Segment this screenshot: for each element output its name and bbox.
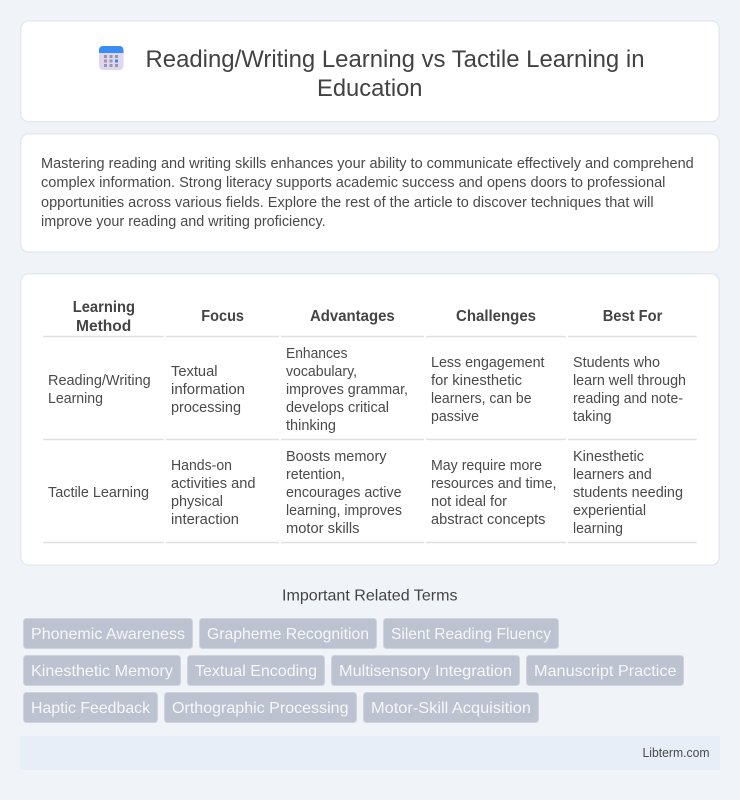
table row: Tactile Learning: interaction bbox=[171, 512, 239, 528]
text block: introduction paragraph: complex information. Strong literacy supports academic success and opens doors to professional bbox=[41, 175, 665, 191]
tag: Manuscript Practice: Manuscript Practice bbox=[534, 663, 677, 680]
table row: Reading/Writing Learning: Enhances bbox=[286, 346, 348, 362]
table row: Reading/Writing Learning: for kinesthetic bbox=[431, 373, 522, 389]
table row: Reading/Writing Learning: vocabulary, bbox=[286, 364, 357, 380]
table row: Tactile Learning: May require more bbox=[431, 458, 542, 474]
panel: introduction bbox=[21, 134, 719, 252]
table row: Tactile Learning: Kinesthetic bbox=[573, 449, 644, 465]
title: Reading/Writing Learning vs Tactile Learning in bbox=[146, 46, 644, 73]
table row: Reading/Writing Learning: Students who bbox=[573, 355, 660, 371]
table row: Tactile Learning: not ideal for bbox=[431, 494, 507, 510]
table row: Tactile Learning: learning bbox=[573, 521, 623, 537]
tag: Orthographic Processing: Orthographic Processing bbox=[172, 700, 348, 717]
table row: Reading/Writing Learning: Textual bbox=[171, 364, 218, 380]
table row: Reading/Writing Learning: reading and note- bbox=[573, 391, 683, 407]
tag: Grapheme Recognition bbox=[200, 618, 376, 648]
table header row: Method bbox=[76, 318, 131, 335]
table row: Tactile Learning: physical bbox=[171, 494, 223, 510]
table row: Reading/Writing Learning bbox=[48, 346, 686, 434]
table row: Tactile Learning: Hands-on bbox=[171, 458, 232, 474]
tag: Textual Encoding bbox=[188, 656, 324, 686]
table header row: Best For bbox=[603, 308, 662, 325]
table row: Tactile Learning: learning, improves bbox=[286, 503, 402, 519]
heading: related terms: Important Related Terms bbox=[282, 588, 458, 604]
text block: introduction paragraph bbox=[41, 156, 694, 230]
tag: Phonemic Awareness bbox=[24, 618, 192, 648]
table row: Tactile Learning: Boosts memory bbox=[286, 449, 387, 465]
table row: Reading/Writing Learning: Learning bbox=[48, 391, 103, 407]
tag: Textual Encoding: Textual Encoding bbox=[195, 663, 317, 680]
icon: calendar bbox=[99, 46, 124, 70]
title bbox=[146, 46, 644, 102]
table row: Reading/Writing Learning: information bbox=[171, 382, 245, 398]
text block: introduction paragraph: Mastering reading and writing skills enhances your ability to communicate effectively and comprehend bbox=[41, 156, 694, 172]
footer: Libterm.com bbox=[642, 745, 710, 760]
table header row: Advantages bbox=[310, 308, 395, 325]
table header row bbox=[73, 299, 662, 335]
table row: Tactile Learning: students needing bbox=[573, 485, 683, 501]
tag: Manuscript Practice bbox=[526, 656, 684, 686]
title: Education bbox=[317, 75, 422, 102]
footer bbox=[20, 736, 720, 770]
tag: Multisensory Integration: Multisensory Integration bbox=[339, 663, 512, 680]
table row: Tactile Learning: learners and bbox=[573, 467, 652, 483]
tag: Haptic Feedback bbox=[24, 692, 158, 722]
table row: Reading/Writing Learning: improves grammar, bbox=[286, 382, 408, 398]
table row: Tactile Learning: activities and bbox=[171, 476, 256, 492]
table row: Tactile Learning: encourages active bbox=[286, 485, 402, 501]
tag: Motor-Skill Acquisition: Motor-Skill Acquisition bbox=[371, 700, 531, 717]
tag: Kinesthetic Memory: Kinesthetic Memory bbox=[31, 663, 173, 680]
tag: Phonemic Awareness: Phonemic Awareness bbox=[31, 626, 185, 643]
tag: Silent Reading Fluency: Silent Reading Fluency bbox=[391, 626, 551, 643]
tag: Grapheme Recognition: Grapheme Recognition bbox=[207, 626, 369, 643]
tag: Multisensory Integration bbox=[332, 656, 520, 686]
table row: Reading/Writing Learning: passive bbox=[431, 409, 479, 425]
table header row: Focus bbox=[201, 308, 244, 325]
table row: Tactile Learning: Tactile Learning bbox=[48, 485, 149, 501]
table row: Tactile Learning: retention, bbox=[286, 467, 345, 483]
table header row: Challenges bbox=[456, 308, 536, 325]
table row: Reading/Writing Learning: learners, can be bbox=[431, 391, 532, 407]
table row: Reading/Writing Learning: processing bbox=[171, 400, 241, 416]
table row: Reading/Writing Learning: develops critical bbox=[286, 400, 389, 416]
tag: Haptic Feedback: Haptic Feedback bbox=[31, 700, 151, 717]
table row: Tactile Learning bbox=[48, 449, 683, 537]
tag: Silent Reading Fluency bbox=[384, 618, 558, 648]
tag: Orthographic Processing bbox=[164, 692, 356, 722]
table row: Reading/Writing Learning: Reading/Writing bbox=[48, 373, 151, 389]
table row: Tactile Learning: experiential bbox=[573, 503, 646, 519]
tag: Kinesthetic Memory bbox=[24, 656, 180, 686]
table row: Reading/Writing Learning: thinking bbox=[286, 418, 336, 434]
table row: Reading/Writing Learning: Less engagement bbox=[431, 355, 544, 371]
table row: Tactile Learning: motor skills bbox=[286, 521, 360, 537]
table row: Tactile Learning: resources and time, bbox=[431, 476, 556, 492]
panel: title card bbox=[21, 21, 719, 122]
text block: introduction paragraph: improve your reading and writing proficiency. bbox=[41, 214, 326, 230]
table row: Tactile Learning: abstract concepts bbox=[431, 512, 546, 528]
table row: Reading/Writing Learning: taking bbox=[573, 409, 612, 425]
panel: comparison table bbox=[21, 274, 719, 565]
panel: related term tags bbox=[24, 618, 684, 722]
table row: Reading/Writing Learning: learn well through bbox=[573, 373, 686, 389]
table header row: Learning bbox=[73, 299, 135, 316]
tag: Motor-Skill Acquisition bbox=[364, 692, 538, 722]
text block: introduction paragraph: opportunities across various fields. Explore the rest of the article to discover techniques that will bbox=[41, 195, 654, 211]
